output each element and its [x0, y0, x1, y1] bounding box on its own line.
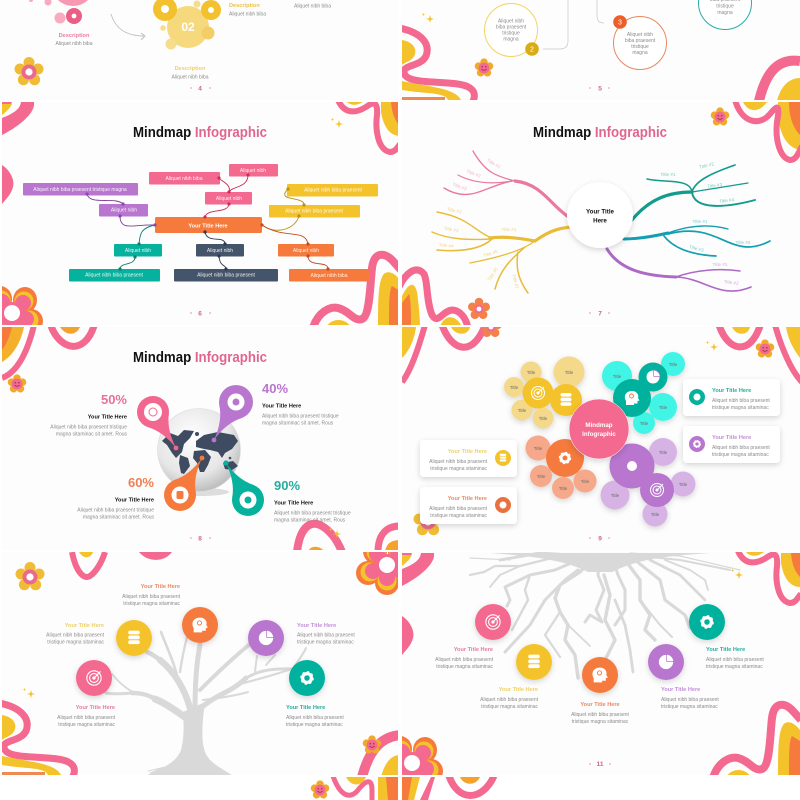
label 50%: Your Title Here: [88, 414, 127, 420]
world map: [162, 430, 238, 474]
yellow bubbles: [504, 356, 584, 428]
page number: 9: [598, 536, 602, 542]
page number: [589, 536, 610, 542]
left slide wave: [333, 776, 398, 800]
branch labels: Title #3: [452, 182, 468, 192]
text pink: Aliquet nibh biba praesent: [57, 715, 116, 721]
orange boxes: [278, 244, 370, 282]
card orange: Aliquet nibh biba praesent: [429, 506, 488, 512]
roots: [470, 553, 740, 678]
label 90%: magna sitaminac sit amet. Rous: [274, 518, 346, 524]
card teal: tristique magna sitaminac: [712, 405, 769, 411]
tree texts: Aliquet nibh biba praesent: [122, 594, 181, 600]
label 90%: Aliquet nibh biba praesent tristique: [274, 510, 351, 516]
central box: Your Title Here: [188, 224, 228, 230]
branch purple: [607, 249, 751, 291]
purple bubbles: [600, 438, 696, 526]
text teal: Aliquet nibh biba praesent: [706, 657, 764, 663]
slide 9: bubble mindmap: [402, 327, 800, 542]
pin purple: [212, 385, 253, 442]
descriptions yellow: Aliquet nibh biba: [294, 4, 331, 10]
descriptions yellow: Aliquet nibh biba: [172, 74, 209, 80]
title: Mindmap Infographic: [133, 124, 267, 141]
circle 3: 3: [618, 20, 622, 26]
bubble icons: [532, 370, 664, 496]
branch labels: Title #1: [693, 219, 708, 224]
description pink: Description: [59, 33, 90, 39]
branch labels: Title #1: [502, 227, 517, 232]
text pink: tristique magna sitaminac: [436, 664, 493, 670]
card yellow: tristique magna sitaminac: [430, 466, 487, 472]
text purple: Your Title Here: [661, 687, 700, 693]
purple boxes: Aliquet nibh: [111, 208, 137, 214]
globe: [158, 408, 240, 496]
tree texts: tristique magna sitaminac: [123, 601, 180, 607]
text orange: [571, 702, 630, 725]
orange bubbles: [526, 436, 596, 499]
centre circle: Your Title: [586, 208, 615, 216]
tree icons: [87, 618, 313, 685]
slide 11: roots: [402, 552, 800, 775]
teal bubbles: [602, 352, 685, 434]
card teal: [683, 379, 780, 416]
descriptions yellow: Description: [175, 66, 206, 72]
bubble titles: Title: [640, 421, 649, 426]
card teal: Aliquet nibh biba praesent: [712, 398, 770, 404]
page number: [589, 310, 610, 318]
text pink: tristique magna sitaminac: [58, 722, 115, 728]
label 60%: [77, 475, 154, 520]
navy boxes: Aliquet nibh: [207, 248, 233, 254]
slide 4: partial process diagram: [0, 0, 398, 100]
teal boxes: Aliquet nibh biba praesent: [85, 272, 144, 278]
text teal: [706, 647, 764, 670]
yellow bubble 02: 02: [181, 20, 195, 34]
branch labels: Title #6: [487, 266, 499, 282]
bubble titles: Title: [510, 385, 519, 390]
card orange: Your Title Here: [448, 496, 487, 502]
text teal: tristique magna sitaminac: [706, 664, 763, 670]
right slide wave: [402, 776, 494, 800]
centre bubble: [569, 399, 629, 459]
bubble titles: Title: [613, 374, 622, 379]
text yellow: Your Title Here: [499, 687, 538, 693]
page number: 5: [598, 86, 602, 92]
navy boxes: [174, 244, 278, 282]
smiley flower: [475, 58, 493, 76]
title: Mindmap Infographic: [533, 124, 667, 141]
card orange: tristique magna sitaminac: [430, 513, 487, 519]
branch labels: Title #1: [486, 158, 502, 170]
branch labels: Title #2: [723, 279, 739, 286]
text teal: tristique magna sitaminac: [286, 722, 343, 728]
label 40%: [262, 381, 339, 426]
card purple: [683, 426, 780, 463]
branch labels: Title #3: [443, 226, 459, 233]
decor waves: [2, 325, 400, 552]
slide 7: organic mindmap: [402, 102, 800, 325]
label 50%: Aliquet nibh biba praesent tristique: [50, 424, 127, 430]
branch teal blue: [624, 226, 770, 256]
card orange: [420, 487, 517, 524]
description pink: [56, 33, 93, 47]
connectors: [543, 0, 604, 49]
bubble titles: Title: [651, 512, 660, 517]
slide 5: partial numbered circles: [399, 0, 800, 103]
title: Mindmap Infographic: [133, 349, 267, 366]
circle 2: tristique: [502, 30, 520, 36]
bubble titles: Title: [581, 479, 590, 484]
text purple: [297, 623, 355, 646]
text pink: [57, 705, 116, 728]
bubble titles: Title: [565, 370, 574, 375]
text yellow: Your Title Here: [65, 623, 104, 629]
branch yellow: [432, 212, 572, 293]
text pink: Your Title Here: [454, 647, 493, 653]
text yellow: Aliquet nibh biba praesent: [480, 697, 539, 703]
teal boxes: Aliquet nibh: [125, 248, 151, 254]
bubble titles: Title: [527, 370, 536, 375]
circle 2: [484, 4, 539, 56]
branch pink: [444, 151, 570, 218]
text yellow: tristique magna sitaminac: [47, 640, 104, 646]
bubble titles: Title: [659, 405, 668, 410]
label 60%: magna sitaminac sit amet. Rous: [83, 514, 154, 520]
branch labels: Title #1: [661, 172, 676, 177]
bottom row: partial slides: [310, 777, 498, 800]
card purple: Aliquet nibh biba praesent: [712, 445, 770, 451]
card yellow: [420, 440, 517, 477]
card teal: Your Title Here: [712, 388, 751, 394]
orange boxes: Aliquet nibh biba: [311, 273, 348, 279]
bubble titles: Title: [537, 474, 546, 479]
decor: [402, 553, 434, 655]
root circles: [475, 604, 725, 693]
page number: [589, 761, 611, 768]
page number: 4: [198, 86, 202, 92]
page number: [190, 536, 211, 542]
branch labels: Title #3: [689, 244, 705, 253]
root icons: [486, 615, 713, 682]
pink boxes: Aliquet nibh biba: [166, 176, 203, 182]
label 40%: Your Title Here: [262, 404, 301, 410]
slide 10: tree: [2, 552, 398, 775]
text yellow: tristique magna sitaminac: [481, 704, 538, 710]
text teal: Your Title Here: [286, 705, 325, 711]
text pink: Aliquet nibh biba praesent: [435, 657, 494, 663]
branch labels: Title #4: [719, 197, 735, 204]
text purple: Aliquet nibh biba praesent: [297, 632, 355, 638]
bubble titles: Title: [659, 450, 668, 455]
circle teal: tristique: [716, 4, 734, 10]
descriptions yellow: Description: [229, 3, 260, 9]
branch labels: Title #3: [707, 182, 723, 189]
page number: [589, 86, 610, 92]
circle 2: biba praesent: [496, 24, 527, 30]
yellow boxes: [269, 184, 378, 218]
text pink: Your Title Here: [76, 705, 115, 711]
page number: 8: [198, 536, 202, 542]
connectors: [87, 175, 328, 269]
purple boxes: [23, 183, 148, 216]
centre circle: Here: [593, 218, 607, 224]
description pink: Aliquet nibh biba: [56, 41, 93, 47]
branch labels: Title #2: [447, 207, 463, 215]
text purple: tristique magna sitaminac: [297, 640, 354, 646]
card yellow: Your Title Here: [448, 449, 487, 455]
arrow: [111, 14, 145, 40]
centre bubble: Mindmap: [585, 422, 613, 429]
text teal: Your Title Here: [706, 647, 745, 653]
card purple: tristique magna sitaminac: [712, 452, 769, 458]
label 50%: 50%: [101, 392, 127, 407]
decor top right wave: [735, 100, 800, 160]
label 40%: magna sitaminac sit amet. Rous: [262, 420, 334, 426]
page number: 6: [198, 310, 202, 318]
text orange: Aliquet nibh biba praesent: [571, 712, 630, 718]
branch labels: Title #1: [713, 262, 728, 267]
yellow boxes: Aliquet nibh biba praesent: [304, 188, 363, 194]
branch labels: Title #4: [438, 242, 454, 249]
flower: [14, 57, 44, 85]
circle teal: magna: [717, 10, 733, 16]
connector dots: [85, 173, 330, 271]
label 90%: Your Title Here: [274, 500, 313, 506]
tree texts: Your Title Here: [141, 584, 180, 590]
text yellow: [46, 623, 105, 646]
star: [422, 13, 434, 23]
centre circle: [567, 182, 633, 248]
orange boxes: Aliquet nibh: [293, 248, 319, 254]
pink boxes: Aliquet nibh: [216, 196, 242, 202]
branch labels: Title #2: [699, 161, 715, 170]
pink boxes: Aliquet nibh: [240, 168, 266, 174]
decor wave: [402, 25, 800, 100]
text purple: tristique magna sitaminac: [661, 704, 718, 710]
page number: [190, 310, 211, 318]
circle 3: Aliquet nibh: [627, 32, 653, 38]
branch teal dark: [632, 165, 755, 220]
text teal: [286, 705, 344, 728]
label 60%: Aliquet nibh biba praesent tristique: [77, 508, 154, 514]
pin pink: [137, 396, 178, 450]
teal boxes: [69, 244, 162, 282]
branch labels: Title #2: [736, 240, 751, 245]
text yellow: [480, 687, 539, 710]
decor: [72, 552, 172, 577]
circle teal: [698, 0, 752, 30]
tree: [106, 632, 306, 776]
pin orange: [164, 456, 204, 511]
text purple: Aliquet nibh biba praesent: [661, 697, 719, 703]
decor waves: [402, 325, 800, 382]
card yellow: Aliquet nibh biba praesent: [429, 459, 488, 465]
circle 2: 2: [530, 46, 534, 54]
text orange: tristique magna sitaminac: [572, 719, 629, 725]
purple boxes: Aliquet nibh biba praesent tristique magna: [33, 187, 127, 193]
page number: 11: [597, 761, 604, 768]
yellow bubble 02: [153, 0, 221, 50]
label 50%: [50, 392, 127, 438]
descriptions yellow: Aliquet nibh biba: [229, 12, 266, 18]
bubble titles: Title: [679, 482, 688, 487]
circle 3: [613, 15, 666, 69]
circle 2: magna: [503, 36, 519, 42]
label 60%: Your Title Here: [115, 498, 154, 504]
text teal: Aliquet nibh biba praesent: [286, 715, 344, 721]
pink boxes: [149, 164, 278, 204]
slide 8: globe pins: [2, 327, 398, 550]
tree texts: [122, 584, 181, 607]
label 60%: 60%: [128, 475, 154, 490]
bubble titles: Title: [611, 493, 620, 498]
bubble titles: Title: [518, 408, 527, 413]
decor bottom left wave: [399, 270, 468, 328]
branch labels: Title #2: [466, 169, 482, 179]
page number: 7: [598, 310, 602, 318]
bubble titles: Title: [534, 446, 543, 451]
descriptions yellow: [172, 3, 331, 80]
card purple: Your Title Here: [712, 435, 751, 441]
circle 3: tristique: [631, 44, 649, 50]
bubble titles: Title: [559, 486, 568, 491]
page number: [190, 86, 211, 92]
label 90%: 90%: [274, 478, 300, 493]
central box: [155, 217, 262, 233]
navy boxes: Aliquet nibh biba praesent: [197, 272, 256, 278]
text pink: [435, 647, 494, 670]
bubble titles: Title: [539, 416, 548, 421]
text yellow: Aliquet nibh biba praesent: [46, 632, 105, 638]
branch labels: Title #7: [511, 274, 520, 290]
circle 3: biba praesent: [625, 38, 656, 44]
tree circles: [76, 607, 325, 696]
branch labels: Title #5: [483, 249, 499, 258]
pink bubble cluster: [29, 0, 95, 24]
bubble titles: Title: [669, 362, 678, 367]
pin teal: [223, 460, 264, 516]
label 50%: magna sitaminac sit amet. Rous: [56, 432, 127, 438]
centre bubble: Infographic: [582, 431, 616, 438]
label 90%: [274, 478, 351, 524]
label 40%: 40%: [262, 381, 288, 396]
text purple: [661, 687, 719, 710]
circle 3: magna: [632, 50, 648, 56]
text orange: Your Title Here: [580, 702, 620, 708]
branch labels: [438, 158, 751, 290]
yellow boxes: Aliquet nibh biba praesent: [285, 208, 344, 214]
bubble titles: [510, 362, 688, 517]
text purple: Your Title Here: [297, 623, 336, 629]
circle 2: Aliquet nibh: [498, 18, 524, 24]
smiley flower: [311, 780, 329, 798]
label 40%: Aliquet nibh biba praesent tristique: [262, 414, 339, 420]
slide 6: box mindmap: [2, 102, 398, 325]
